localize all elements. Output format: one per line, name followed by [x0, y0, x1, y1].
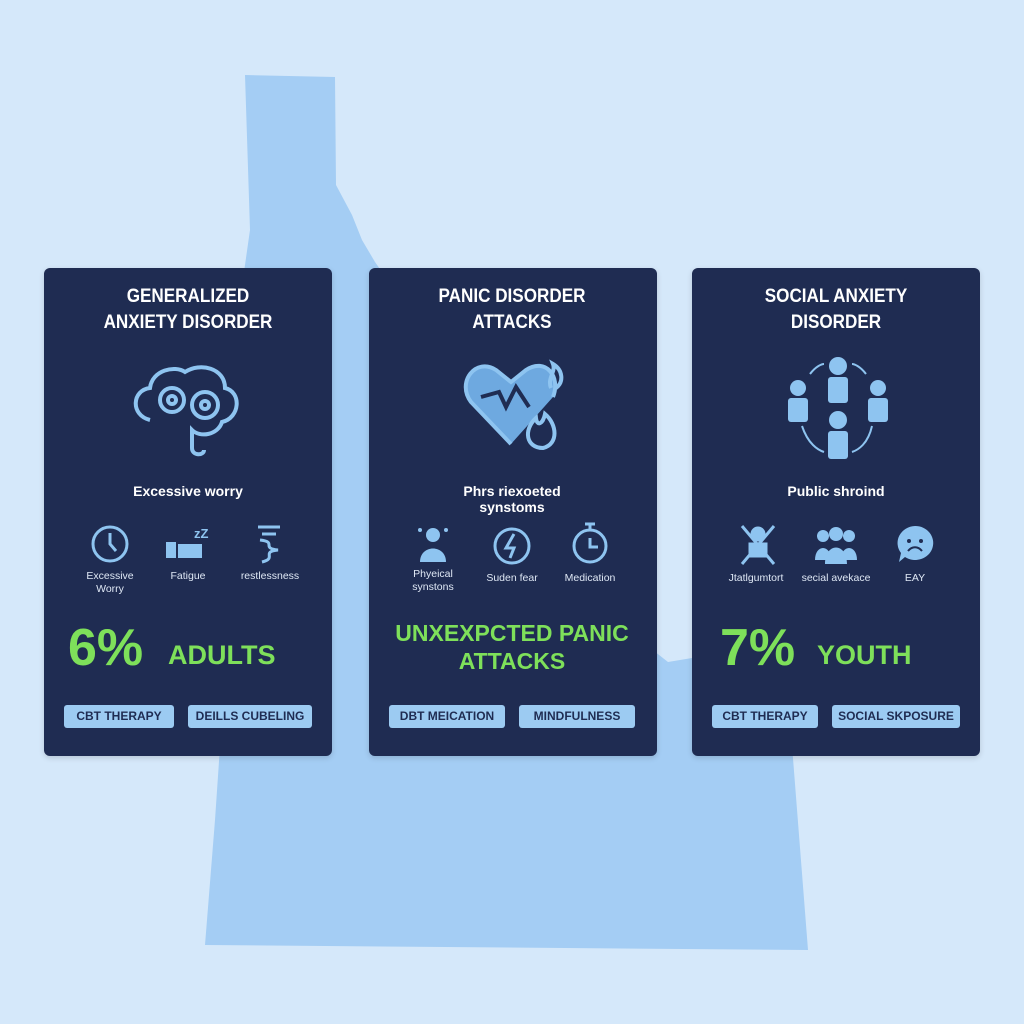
- statistic: 6%: [68, 619, 143, 677]
- text: Phyeical: [413, 568, 453, 580]
- icon: sudden fear: [494, 528, 530, 564]
- pills: [64, 705, 174, 728]
- heading: DISORDER: [791, 312, 881, 333]
- text: EAY: [905, 572, 925, 584]
- icon: fatigue: [166, 526, 208, 558]
- heading: PANIC DISORDER: [439, 286, 585, 307]
- statistic: ATTACKS: [459, 648, 565, 674]
- panel: social anxiety disorder: [692, 268, 980, 756]
- heading: ANXIETY DISORDER: [104, 312, 272, 333]
- text: synstons: [412, 581, 454, 593]
- text: Excessive: [86, 570, 134, 582]
- icon: fatigue: zZ: [194, 526, 208, 541]
- icon: physical symptoms: [418, 528, 448, 562]
- icon: restlessness spring: [258, 526, 280, 564]
- text: ADULTS: [168, 640, 276, 670]
- icon: people circle: [788, 357, 888, 459]
- text: unexpected symptoms: Phrs riexoeted: [463, 483, 561, 499]
- heading: [104, 286, 272, 333]
- heading: SOCIAL ANXIETY: [765, 286, 907, 307]
- heading: [439, 286, 586, 333]
- pills: [712, 705, 818, 728]
- panel: panic disorder: [369, 268, 657, 756]
- pills: [389, 705, 505, 728]
- text: SOCIAL SKPOSURE: [838, 709, 954, 723]
- text: public shame: Public shroind: [787, 483, 885, 499]
- icon: heart with flame: [464, 360, 564, 450]
- text: Suden fear: [486, 572, 538, 584]
- text: secial avekace: [802, 572, 870, 584]
- text: MINDFULNESS: [534, 709, 620, 723]
- statistic: [395, 620, 629, 674]
- icon: stopwatch: [572, 522, 608, 564]
- text: DEILLS CUBELING: [196, 709, 304, 723]
- icon: sad speech bubble: [898, 526, 934, 562]
- statistic: UNXEXPCTED PANIC: [395, 620, 629, 646]
- text: restlessness: [241, 570, 299, 582]
- text: Worry: [96, 583, 124, 595]
- pills: CBT THERAPY: [722, 709, 808, 723]
- text: YOUTH: [817, 640, 912, 670]
- pills: DBT MEICATION: [400, 709, 494, 723]
- pills: CBT THERAPY: [76, 709, 162, 723]
- heading: ATTACKS: [472, 312, 552, 333]
- heading: GENERALIZED: [127, 286, 249, 307]
- icon: crossed figure: [741, 525, 775, 565]
- icon: brain with gears: [134, 365, 239, 456]
- text: Jtatlgumtort: [729, 572, 783, 584]
- icon: clock: [92, 526, 128, 562]
- text: excessive worry: Excessive worry: [133, 483, 243, 499]
- text: unexpected symptoms: [463, 483, 561, 515]
- text: unexpected symptoms: synstoms: [479, 499, 545, 515]
- statistic: 7%: [720, 619, 795, 677]
- text: Medication: [565, 572, 615, 584]
- heading: [765, 286, 907, 333]
- text: Fatigue: [170, 570, 206, 582]
- icon: group: [815, 527, 857, 564]
- panel: generalized anxiety disorder: [44, 268, 332, 756]
